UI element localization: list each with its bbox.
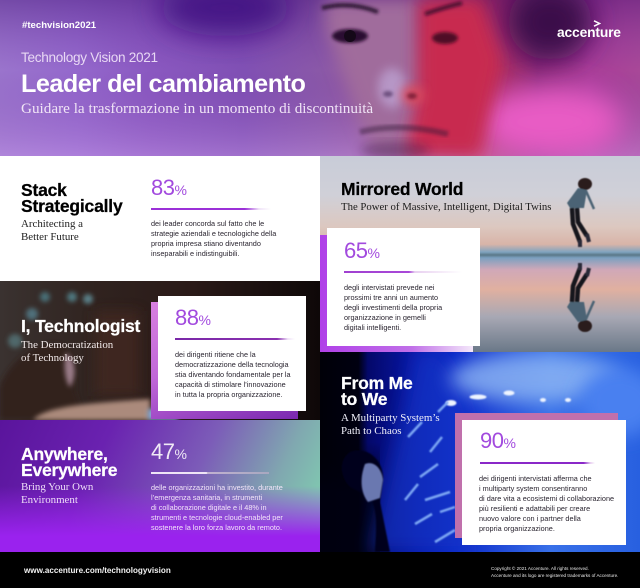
reflection (567, 263, 594, 332)
card (327, 228, 480, 346)
subheading: Path to Chaos (341, 425, 402, 437)
body text: nuovo valore con i partner della (479, 514, 581, 523)
body text: degli intervistati prevede nei (344, 283, 434, 292)
subheading (21, 339, 114, 364)
subheading: The Power of Massive, Intelligent, Digital Twins (341, 201, 551, 213)
body text: organizzazione in gemelli (344, 313, 426, 322)
heading: Strategically (21, 196, 122, 216)
logo wordmark: accenture (557, 24, 621, 40)
subheading: of Technology (21, 352, 84, 364)
body text: di dare vita a ecosistemi di collaborazione (479, 494, 614, 503)
heading (21, 180, 123, 216)
progress bar 47% (151, 472, 269, 474)
body text: dei leader concorda sul fatto che le (151, 219, 264, 228)
statistic 65%: 65% (344, 238, 380, 262)
body text: digitali intelligenti. (344, 323, 401, 332)
subheading (21, 218, 83, 242)
panel: Mirrored World (320, 156, 640, 352)
heading: From Me (341, 373, 413, 393)
copyright (491, 566, 618, 578)
subheading: Better Future (21, 230, 79, 242)
photo: person facing aquarium (320, 352, 640, 552)
body text: delle organizzazioni ha investito, durante (151, 483, 283, 492)
hashtag: #techvision2021 (22, 20, 96, 30)
card backing (320, 235, 473, 352)
body text: i multiparty system consentiranno (479, 484, 587, 493)
subtitle: Guidare la trasformazione in un momento di discontinuità (21, 100, 373, 117)
panel: header banner (0, 0, 640, 156)
subheading: Environment (21, 494, 78, 506)
heading (341, 373, 413, 409)
heading: Anywhere, (21, 444, 108, 464)
photo: jumping figure reflected on salt flat (320, 156, 640, 352)
body text (175, 350, 291, 398)
panel: Stack Strategically (0, 156, 320, 281)
body text (151, 483, 283, 532)
logo: accenture (557, 20, 621, 40)
subheading (341, 412, 440, 437)
body text: strategie aziendali e tecnologiche della (151, 229, 276, 238)
body text: stia diventando fondamentale per la (175, 370, 291, 378)
statistic 83%: 83% (151, 175, 187, 200)
body text: propria organizzazione. (479, 524, 555, 533)
body text: di collaborazione digitale e il 48% in (151, 503, 267, 512)
body text (344, 283, 442, 332)
logo arrow (594, 20, 601, 27)
body text: in tutta la propria organizzazione. (175, 390, 282, 398)
header photo: face with purple and red light (0, 0, 640, 156)
progress bar 88% (175, 338, 295, 340)
progress bar 90% (480, 462, 595, 464)
card backing (151, 302, 298, 419)
body text (479, 474, 614, 533)
body text: sostenere la loro forza lavoro da remoto. (151, 523, 282, 532)
footer (0, 552, 640, 588)
heading: Everywhere (21, 460, 117, 480)
body text: prossimi tre anni un aumento (344, 293, 438, 302)
subheading (21, 481, 94, 506)
photo: woman with long hair and bokeh lights (0, 281, 320, 420)
body text: inseparabili e indistinguibili. (151, 249, 239, 258)
copyright: Accenture and its logo are registered trademarks of Accenture. (491, 572, 618, 578)
statistic 47%: 47% (151, 439, 187, 464)
subheading: Bring Your Own (21, 481, 93, 493)
card (158, 296, 306, 411)
body text: strumenti e tecnologie cloud-enabled per (151, 513, 283, 522)
statistic 90%: 90% (480, 428, 516, 453)
card (462, 420, 626, 545)
body text: propria impresa stiano diventando (151, 239, 261, 248)
panel: Anywhere, Everywhere (0, 420, 320, 552)
body text: dei dirigenti ritiene che la (175, 350, 256, 358)
heading (21, 444, 117, 480)
body text: degli investimenti della propria (344, 303, 442, 312)
card backing (455, 413, 618, 538)
subheading: Architecting a (21, 218, 83, 230)
copyright: Copyright © 2021 Accenture. All rights reserved. (491, 566, 589, 570)
body text: capacità di stimolare l’innovazione (175, 380, 286, 388)
panel: From Me to We (320, 352, 640, 552)
body text (151, 219, 276, 258)
subheading: The Democratization (21, 339, 113, 351)
heading: I, Technologist (21, 316, 140, 336)
progress bar 83% (151, 208, 271, 210)
title: Leader del cambiamento (21, 70, 305, 98)
heading: to We (341, 389, 387, 409)
eyebrow: Technology Vision 2021 (21, 50, 158, 64)
body text: l’emergenza sanitaria, in strumenti (151, 493, 262, 502)
heading: Stack (21, 180, 67, 200)
figure (567, 178, 594, 247)
body text: democratizzazione della tecnologia (175, 360, 289, 368)
website link: www.accenture.com/technologyvision (24, 566, 171, 574)
heading: Mirrored World (341, 179, 463, 199)
panel: I, Technologist (0, 281, 320, 420)
body text: più resilienti e adattabili per creare (479, 504, 590, 513)
progress bar 65% (344, 271, 462, 273)
subheading: A Multiparty System’s (341, 412, 440, 424)
statistic 88%: 88% (175, 304, 211, 330)
body text: dei dirigenti intervistati afferma che (479, 474, 592, 483)
